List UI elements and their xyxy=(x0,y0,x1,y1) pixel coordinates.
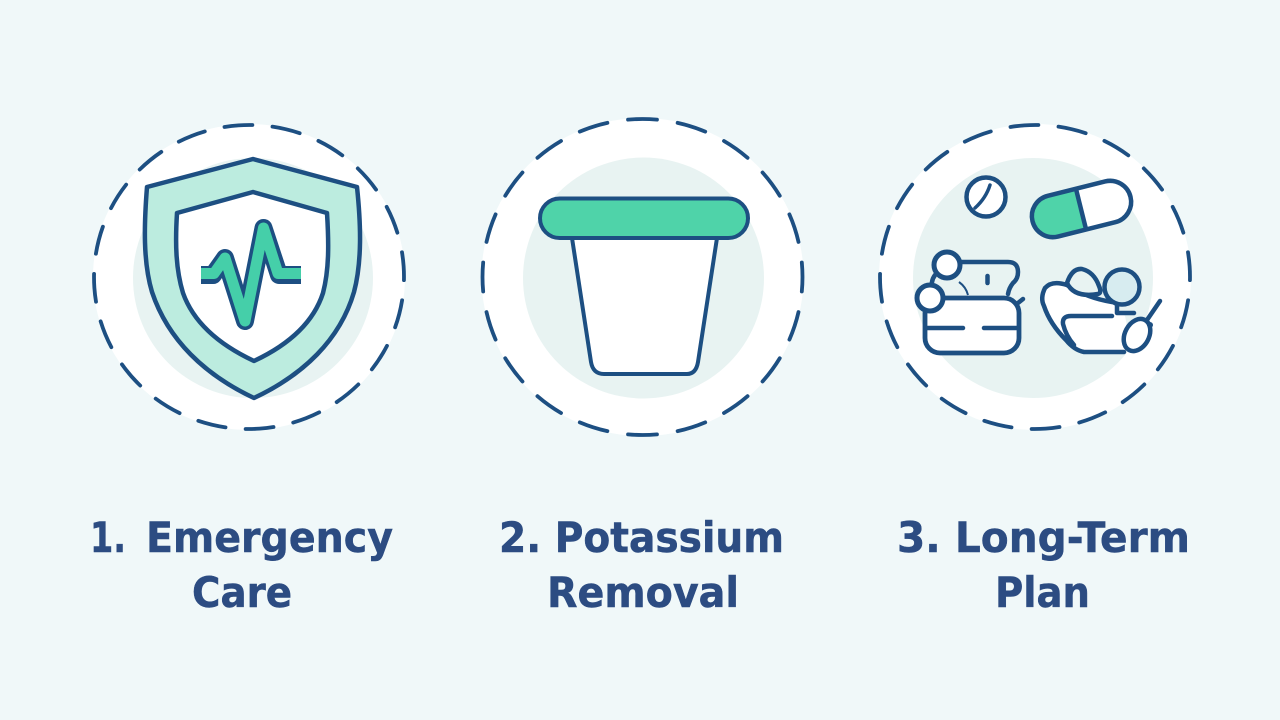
panel: long-term plan xyxy=(870,115,1200,439)
heading: 3. Long-Term Plan xyxy=(897,513,1190,617)
white disc xyxy=(482,118,804,436)
dashed ring xyxy=(870,115,1200,439)
heading: 2. Potassium Removal: 2. Potassium xyxy=(499,513,784,562)
heading: 3. Long-Term Plan: 3. Long-Term xyxy=(897,513,1190,562)
icon: capsule xyxy=(1027,176,1136,242)
icon: fruit bowl xyxy=(1042,269,1160,356)
dashed ring xyxy=(84,115,414,439)
panel: potassium removal xyxy=(482,118,804,436)
icon: shield with heartbeat xyxy=(145,159,360,398)
heading: 1. Emergency Care: Emergency xyxy=(146,513,393,562)
dashed ring xyxy=(482,119,802,435)
heading: 1. Emergency Care: Care xyxy=(192,568,292,617)
heading: 3. Long-Term Plan: Plan xyxy=(995,568,1090,617)
pale inner circle xyxy=(523,158,764,398)
white disc xyxy=(879,124,1191,430)
icon: tablet xyxy=(966,178,1006,216)
heading: 2. Potassium Removal: Removal xyxy=(547,568,739,617)
icon: bucket xyxy=(540,198,748,374)
panel: emergency care xyxy=(84,115,414,439)
pale inner circle xyxy=(913,158,1153,398)
icon: food basket xyxy=(917,252,1023,353)
heading: 1. Emergency Care: 1. xyxy=(90,513,126,562)
heading: 1. Emergency Care xyxy=(90,513,393,617)
white disc xyxy=(93,124,405,430)
pale inner circle xyxy=(133,158,373,398)
heading: 2. Potassium Removal xyxy=(499,513,784,617)
